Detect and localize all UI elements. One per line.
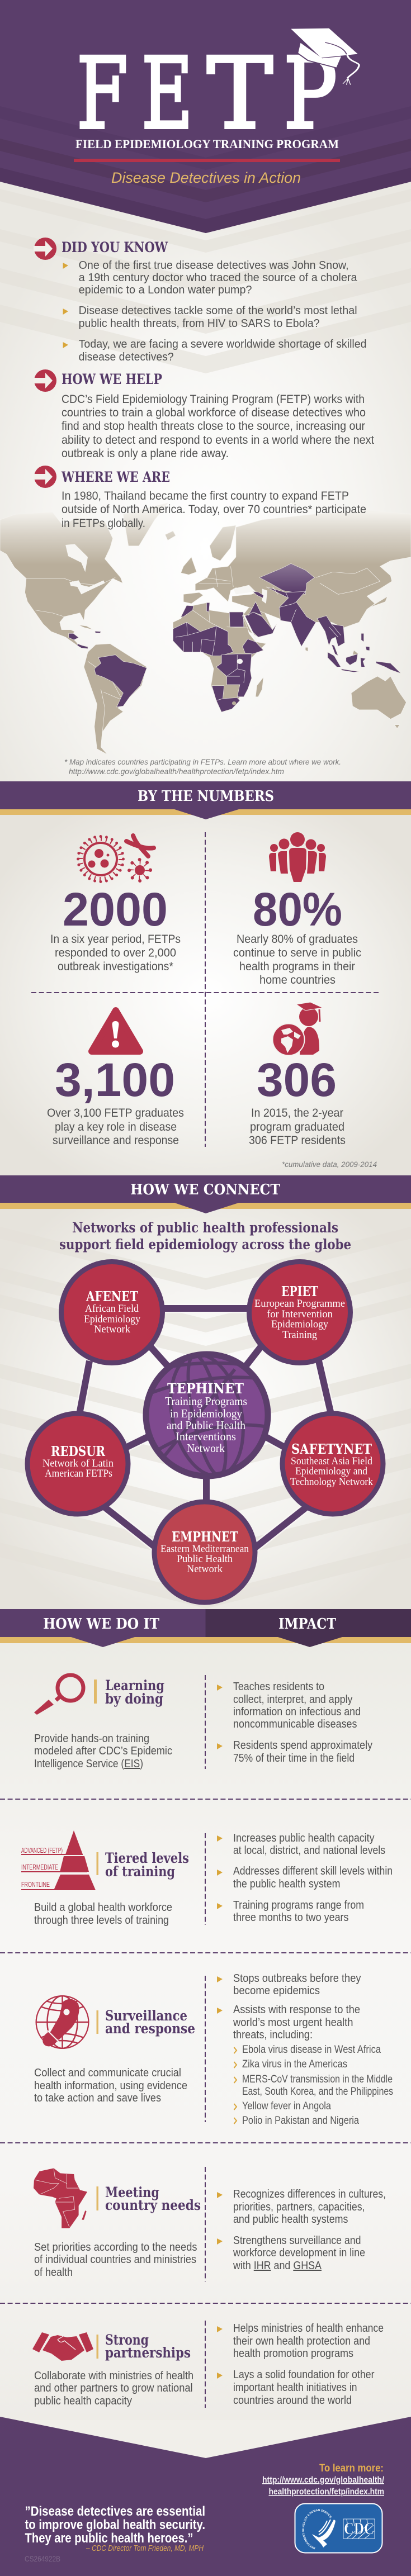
icon: training pyramid <box>21 1830 96 1890</box>
logo: HHS and CDC: DEPARTMENT OF HEALTH & HUMAN SERVICES USA <box>302 2509 332 2550</box>
learn more links <box>262 2463 384 2497</box>
title: by doing <box>105 1691 163 1707</box>
node: EPIET: Training <box>282 1329 317 1341</box>
sub-list of threats <box>234 2044 393 2127</box>
description: Set priorities according to the needs <box>34 2241 197 2254</box>
node: AFENET <box>62 1262 162 1363</box>
description: Intelligence Service (EIS) <box>34 1758 143 1770</box>
learn more links: healthprotection/fetp/index.htm <box>268 2487 384 2497</box>
icon: arrow <box>34 466 56 488</box>
stat: 306: In 2015, the 2-year <box>251 1107 343 1119</box>
map footnote: http://www.cdc.gov/globalhealth/healthprotection/fetp/index.htm <box>69 767 284 776</box>
row: surveillance and response <box>34 1972 393 2127</box>
node: AFENET: African Field <box>85 1303 139 1315</box>
impact list <box>217 1972 393 2127</box>
banner: how we connect <box>0 1175 411 1213</box>
paragraph: CDC’s Field Epidemiology Training Program (FETP) works with <box>62 393 365 406</box>
sub-list of threats: Zika virus in the Americas <box>242 2058 347 2070</box>
title <box>105 2332 191 2361</box>
title FETP: T <box>207 37 273 151</box>
impact list: Increases public health capacity <box>233 1832 375 1844</box>
node: SAFETYNET <box>282 1413 383 1514</box>
icon: training pyramid: INTERMEDIATE <box>21 1863 58 1871</box>
icon: training pyramid: FRONTLINE <box>21 1881 50 1889</box>
heading: networks <box>59 1220 351 1253</box>
paragraph: In 1980, Thailand became the first country to expand FETP <box>62 490 349 502</box>
description <box>34 2067 187 2104</box>
description: through three levels of training <box>34 1914 169 1927</box>
description: Provide hands-on training <box>34 1733 149 1745</box>
icon: viruses <box>78 836 154 882</box>
title <box>105 1850 189 1880</box>
panel: did you know <box>34 238 367 363</box>
banners: how we do it, impact: IMPACT <box>278 1616 337 1633</box>
description <box>34 1901 172 1927</box>
impact list: threats, including: <box>233 2029 313 2041</box>
impact list <box>217 1681 372 1764</box>
node: AFENET: AFENET <box>86 1288 138 1304</box>
node: TEPHINET globe: Interventions <box>176 1430 236 1443</box>
description <box>34 2370 193 2407</box>
description: and other partners to grow national <box>34 2382 193 2394</box>
impact list: collect, interpret, and apply <box>233 1693 352 1706</box>
bullet 1: a 19th century doctor who traced the source of a cholera <box>79 272 357 284</box>
impact list: Assists with response to the <box>233 2004 360 2016</box>
map footnote <box>64 757 341 776</box>
title: Meeting <box>105 2184 159 2200</box>
title: Learning <box>105 1677 164 1693</box>
stat: 2000: outbreak investigations* <box>58 960 173 973</box>
bullet 1: epidemic to a London water pump? <box>79 284 252 296</box>
sub-list of threats: Polio in Pakistan and Nigeria <box>242 2115 359 2127</box>
stat: 3,100: 3,100 <box>55 1054 175 1106</box>
document code: CS264922B <box>25 2554 60 2563</box>
paragraph: in FETPs globally. <box>62 517 145 530</box>
stat: 3,100: surveillance and response <box>53 1134 179 1147</box>
description: Build a global health workforce <box>34 1901 172 1914</box>
description: of health <box>34 2266 73 2279</box>
impact list: priorities, partners, capacities, <box>233 2201 365 2213</box>
sub-list of threats: Yellow fever in Angola <box>242 2100 331 2112</box>
node: REDSUR: American FETPs <box>45 1468 112 1479</box>
icon: people <box>269 832 326 882</box>
icon: graduation cap <box>291 29 359 85</box>
tagline: Disease Detectives in Action <box>111 169 301 186</box>
bullet 3 <box>63 338 367 363</box>
stat: 2000: In a six year period, FETPs <box>50 933 181 946</box>
description: health information, using evidence <box>34 2080 187 2092</box>
quote: ”Disease detectives are essential <box>25 2504 205 2519</box>
description <box>34 1733 172 1770</box>
node: EPIET: Epidemiology <box>271 1318 328 1330</box>
paragraph <box>62 393 374 460</box>
paragraph: outside of North America. Today, over 70 countries* participate <box>62 503 366 516</box>
impact list <box>217 2322 384 2407</box>
impact list: Training programs range from <box>233 1899 364 1911</box>
banner: how we connect: HOW WE CONNECT <box>130 1182 281 1198</box>
heading: did you know: DID YOU KNOW <box>62 239 168 255</box>
stat: 3,100: Over 3,100 FETP graduates <box>47 1107 184 1119</box>
title: Tiered levels <box>105 1850 189 1866</box>
network connectors <box>79 1308 331 1548</box>
node: TEPHINET globe: Training Programs <box>165 1394 247 1408</box>
title FETP <box>77 37 337 151</box>
node: TEPHINET globe: in Epidemiology <box>170 1407 242 1420</box>
stat: 80%: continue to serve in public <box>233 947 361 959</box>
quote: to improve global health security. <box>25 2517 205 2532</box>
banners: how we do it, impact: HOW WE DO IT <box>43 1616 160 1633</box>
stat: 306: 306 <box>257 1054 337 1106</box>
impact list: their own health protection and <box>233 2335 370 2347</box>
node: AFENET: Network <box>94 1323 130 1335</box>
icon: Africa <box>34 2168 87 2228</box>
title: partnerships <box>105 2345 191 2361</box>
impact list: Residents spend approximately <box>233 1739 372 1752</box>
impact list: 75% of their time in the field <box>233 1752 355 1764</box>
impact list: Teaches residents to <box>233 1681 324 1693</box>
stat: 3,100 <box>47 1054 184 1147</box>
node: REDSUR <box>27 1413 128 1514</box>
stat: 80%: home countries <box>259 974 336 986</box>
impact list: workforce development in line <box>233 2247 365 2259</box>
panel: how we help <box>34 369 374 460</box>
icon: handshake <box>32 2332 93 2361</box>
impact list: Addresses different skill levels within <box>233 1865 393 1877</box>
description: of individual countries and ministries <box>34 2254 196 2266</box>
row: tiered levels <box>21 1830 393 1927</box>
learn more links: http://www.cdc.gov/globalhealth/ <box>262 2475 384 2485</box>
title <box>105 1677 164 1707</box>
title FETP: F <box>77 37 128 151</box>
node: TEPHINET globe: and Public Health <box>167 1419 245 1432</box>
paragraph: outbreak is only a plane ride away. <box>62 447 229 460</box>
panel: how we do it and impact <box>0 1609 411 2420</box>
quote: They are public health heroes.” <box>25 2531 193 2546</box>
icon: arrow <box>34 238 56 260</box>
impact list: information on infectious and <box>233 1706 361 1718</box>
impact list: world’s most urgent health <box>233 2017 353 2029</box>
node: EMPHNET: Eastern Mediterranean <box>160 1543 249 1555</box>
node: REDSUR: REDSUR <box>51 1443 106 1459</box>
stat: 2000: 2000 <box>63 883 168 936</box>
impact list <box>217 1832 393 1924</box>
node: AFENET: Epidemiology <box>84 1313 140 1325</box>
impact list: and public health systems <box>233 2213 348 2226</box>
description: Collaborate with ministries of health <box>34 2370 193 2382</box>
stat: 2000 <box>50 883 181 973</box>
title: country needs <box>105 2197 201 2213</box>
impact list: health promotion programs <box>233 2347 353 2360</box>
impact list: Strengthens surveillance and <box>233 2235 361 2247</box>
quote: – CDC Director Tom Frieden, MD, MPH <box>86 2544 204 2553</box>
row: learning by doing <box>34 1675 372 1770</box>
icon: graduate with globe <box>273 1002 323 1055</box>
description: public health capacity <box>34 2395 132 2407</box>
stat: 80%: Nearly 80% of graduates <box>237 933 358 946</box>
node: EMPHNET: Public Health <box>177 1553 233 1565</box>
panel: where we are <box>34 466 366 776</box>
icon: magnifying glass <box>34 1675 83 1715</box>
node: SAFETYNET: Epidemiology and <box>295 1465 367 1477</box>
world map <box>0 503 411 755</box>
heading: networks: Networks of public health professionals <box>72 1220 338 1236</box>
stat: 2000: responded to over 2,000 <box>55 947 176 959</box>
impact list: Helps ministries of health enhance <box>233 2322 384 2335</box>
node: REDSUR: Network of Latin <box>42 1458 114 1469</box>
stat: 3,100: play a key role in disease <box>55 1121 177 1133</box>
bullet 2 <box>63 305 357 330</box>
bullet 2: Disease detectives tackle some of the world’s most lethal <box>79 305 357 317</box>
stat: 80% <box>233 883 361 986</box>
row: meeting country needs <box>34 2168 386 2279</box>
bullet 3: Today, we are facing a severe worldwide shortage of skilled <box>79 338 367 350</box>
impact list: the public health system <box>233 1878 340 1890</box>
stat: 80%: 80% <box>253 883 342 936</box>
stat: 306: 306 FETP residents <box>249 1134 346 1147</box>
node: TEPHINET globe: TEPHINET <box>167 1380 244 1397</box>
node: EMPHNET: Network <box>187 1563 223 1575</box>
red divider <box>74 159 340 162</box>
description: to take action and save lives <box>34 2092 161 2104</box>
impact list: countries around the world <box>233 2394 352 2407</box>
icon: globe with footprint <box>35 1995 89 2050</box>
node: EMPHNET <box>154 1502 255 1602</box>
description <box>34 2241 197 2279</box>
banner: by the numbers: BY THE NUMBERS <box>138 788 274 805</box>
map footnote: * Map indicates countries participating in FETPs. Learn more about where we work. <box>64 757 341 766</box>
data note: *cumulative data, 2009-2014 <box>282 1160 377 1169</box>
title <box>105 2184 201 2213</box>
title FETP: E <box>141 37 193 151</box>
impact list: three months to two years <box>233 1911 349 1924</box>
paragraph: countries to train a global workforce of disease detectives who <box>62 406 366 419</box>
quote <box>25 2504 205 2553</box>
bullet 1: One of the first true disease detectives was John Snow, <box>79 259 349 272</box>
stat: 306 <box>249 1054 346 1147</box>
heading: networks: support field epidemiology across the globe <box>59 1236 351 1253</box>
impact list: become epidemics <box>233 1985 320 1997</box>
subtitle: FIELD EPIDEMIOLOGY TRAINING PROGRAM <box>75 137 339 151</box>
title <box>105 2008 195 2037</box>
panel: how we connect <box>0 1175 411 1609</box>
description: modeled after CDC’s Epidemic <box>34 1745 172 1757</box>
node: SAFETYNET: Southeast Asia Field <box>291 1455 372 1467</box>
title: and response <box>105 2020 195 2037</box>
banner: by the numbers <box>0 781 411 819</box>
node: EMPHNET: EMPHNET <box>172 1529 238 1545</box>
paragraph <box>62 490 366 530</box>
title FETP: P <box>284 37 337 151</box>
panel: by the numbers <box>0 781 411 1176</box>
node: TEPHINET globe <box>140 1348 274 1482</box>
heading: where we are: WHERE WE ARE <box>61 469 170 485</box>
heading: how we help: HOW WE HELP <box>62 371 162 387</box>
node: SAFETYNET: SAFETYNET <box>291 1441 372 1457</box>
node: EPIET <box>249 1262 350 1363</box>
node: SAFETYNET: Technology Network <box>290 1476 373 1488</box>
impact list: at local, district, and national levels <box>233 1844 385 1857</box>
learn more links: To learn more: <box>319 2463 384 2474</box>
impact list: Stops outbreaks before they <box>233 1972 361 1985</box>
icon: training pyramid: ADVANCED (FETP) <box>21 1847 63 1854</box>
description: Collect and communicate crucial <box>34 2067 181 2079</box>
header banner <box>0 0 411 233</box>
impact list: with IHR and GHSA <box>233 2260 322 2272</box>
paragraph: ability to detect and respond to events in a world where the next <box>62 434 374 447</box>
node: EPIET: EPIET <box>281 1283 318 1299</box>
banners: how we do it, impact <box>0 1609 411 1647</box>
title: Strong <box>105 2332 149 2348</box>
bullet 1 <box>63 259 357 296</box>
impact list: noncommunicable diseases <box>233 1718 357 1730</box>
node: EPIET: for Intervention <box>267 1308 333 1320</box>
sub-list of threats: Ebola virus disease in West Africa <box>242 2044 381 2056</box>
bullet 3: disease detectives? <box>79 351 174 363</box>
impact list: Lays a solid foundation for other <box>233 2369 375 2381</box>
title: of training <box>105 1863 175 1880</box>
impact list: Recognizes differences in cultures, <box>233 2188 386 2200</box>
logo: HHS and CDC: CDC <box>344 2518 374 2538</box>
row: strong partnerships <box>32 2322 384 2407</box>
page background: intro panel <box>0 168 411 782</box>
impact list <box>217 2188 386 2272</box>
bullet 2: public health threats, from HIV to SARS to Ebola? <box>79 317 320 330</box>
impact list: important health initiatives in <box>233 2382 357 2394</box>
node: EPIET: European Programme <box>254 1298 345 1310</box>
stat: 306: program graduated <box>250 1121 344 1133</box>
icon: arrow <box>34 369 56 392</box>
node: TEPHINET globe: Network <box>187 1441 225 1455</box>
title: Surveillance <box>105 2008 187 2024</box>
paragraph: find and stop health threats close to the source, increasing our <box>62 420 365 433</box>
stat: 80%: health programs in their <box>239 960 355 973</box>
icon: warning triangle <box>92 1011 140 1051</box>
